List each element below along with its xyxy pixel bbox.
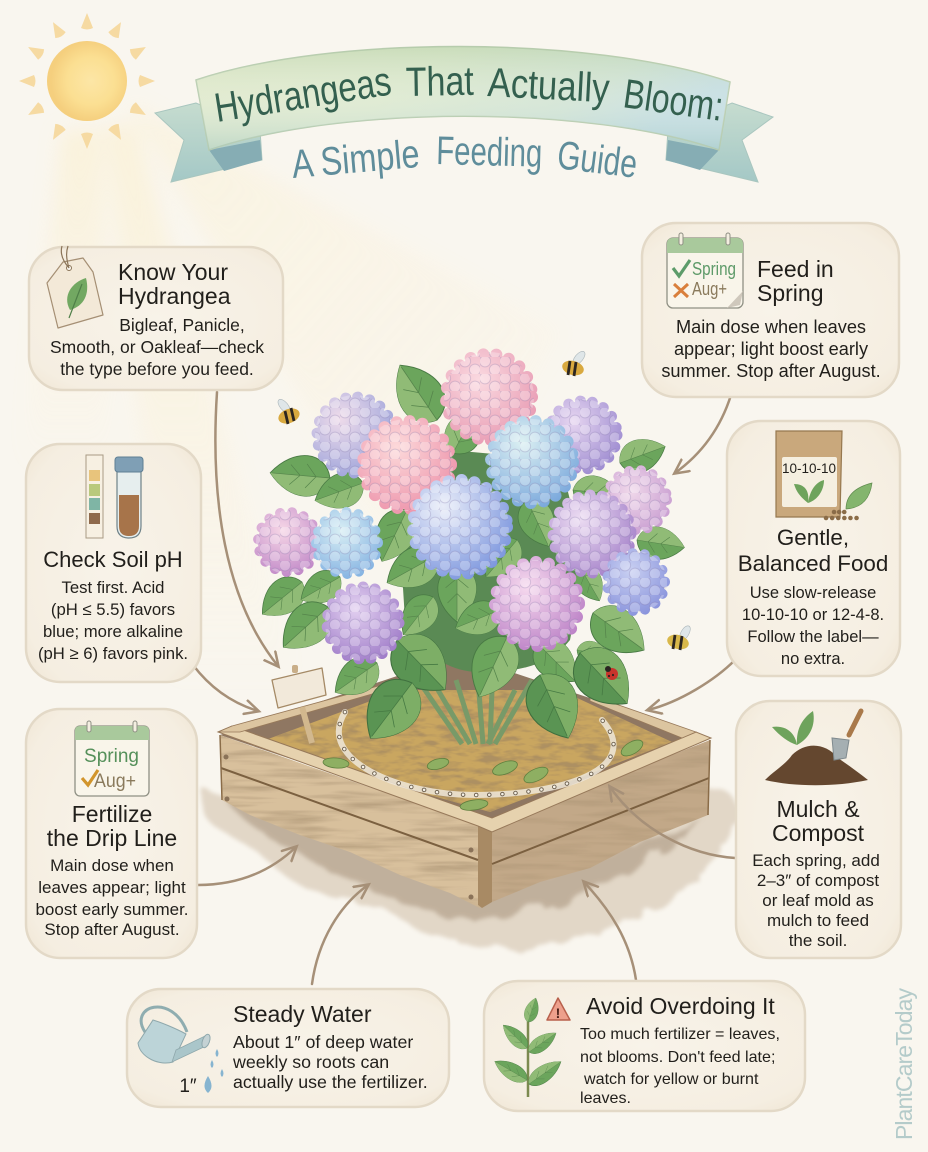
icon: warning triangle: ! [556,1005,560,1021]
bee top right [561,349,587,378]
heading: Avoid Overdoing It [586,993,775,1019]
panel: feed in spring [642,223,899,397]
bee right [666,624,692,652]
stems [418,680,532,744]
body text: weekly so roots can [232,1052,389,1072]
top rim [218,726,711,832]
body text: the soil. [789,931,847,950]
body text: not blooms. Don't feed late; [580,1048,775,1066]
body text: 10-10-10 or 12-4-8. [742,606,884,624]
title line 1: That [405,58,475,105]
soil stain under planter [202,785,738,947]
panel: mulch and compost [736,701,901,958]
panel: know your hydrangea [29,246,283,390]
mulch [252,690,672,812]
dark foliage backing [400,450,585,672]
body text: Follow the label— [747,628,879,646]
panel: steady water [127,989,449,1107]
icon: watering can [138,1007,224,1097]
title line 2 [290,129,640,187]
icon: sun [19,13,155,149]
right wall [492,740,710,902]
icon: fertilizer bag [776,431,872,518]
body text: Too much fertilizer = leaves, [580,1025,780,1043]
body text: summer. Stop after August. [661,361,881,381]
body text: Main dose when [50,856,174,875]
ladybug [605,666,618,680]
body text: Bigleaf, Panicle, [119,315,245,335]
fallen leaves on mulch [323,737,645,812]
arrows [193,392,735,984]
panel: avoid overdoing it [484,981,805,1111]
body text: or leaf mold as [762,891,874,910]
brand watermark: PlantCareToday [891,988,917,1140]
bee left [276,397,302,426]
title line 1: Hydrangeas [211,58,394,131]
sun beams [22,100,560,690]
title line 2: Guide [555,133,640,187]
body text: (pH ≤ 5.5) favors [51,600,175,619]
icon: compost pile with trowel [765,711,868,785]
body text: Main dose when leaves [676,317,866,337]
heading: Spring [757,280,823,306]
title line 1: Bloom: [621,70,726,130]
body text: appear; light boost early [674,339,869,359]
heading: the Drip Line [47,825,177,851]
heading: Mulch & [776,796,860,822]
icon: calendar [75,721,149,796]
body text: mulch to feed [767,911,869,930]
icon: test strip and tube [86,455,143,538]
body text: leaves. [580,1089,631,1107]
body text: Each spring, add [752,851,880,870]
body text: watch for yellow or burnt [583,1070,759,1088]
panel: check soil pH [26,444,201,682]
heading: Balanced Food [738,551,888,576]
icon: calendar with check and cross: Aug+ [692,279,727,299]
title line 1 [211,58,726,131]
inner back wall [220,655,710,826]
body text: Smooth, or Oakleaf—check [50,337,264,357]
body text: About 1″ of deep water [233,1032,413,1052]
body text: (pH ≥ 6) favors pink. [38,644,188,663]
leaves [252,353,687,753]
body text: actually use the fertilizer. [233,1072,428,1092]
heading: Check Soil pH [43,547,183,572]
panel: fertilize the drip line [26,709,197,958]
body text: the type before you feed. [60,359,254,379]
body text: leaves appear; light [38,878,186,897]
body text: blue; more alkaline [43,622,183,641]
icon: watering can: 1″ [179,1076,197,1097]
title line 2: Feeding [436,129,543,176]
planter box [218,655,711,908]
icon: stressed plant [491,996,566,1097]
body text: Stop after August. [44,920,180,939]
icon: warning triangle [547,998,570,1021]
body text: no extra. [781,650,845,668]
heading: Know Your [118,259,228,285]
heading: Compost [772,820,865,846]
title banner [155,46,773,187]
title line 2: A Simple [290,132,421,187]
body text: 2–3″ of compost [757,871,879,890]
flower heads [256,352,669,661]
heading: Hydrangea [118,283,231,309]
front post [478,824,492,908]
garden marker sign [272,665,326,743]
heading: Fertilize [72,801,152,827]
body text: Use slow-release [750,584,876,602]
body text: boost early summer. [35,900,189,919]
icon: calendar: Spring [84,746,139,767]
icon: calendar with check and cross: Spring [692,259,736,279]
hydrangea plant [252,352,687,753]
heading: Gentle, [777,525,849,550]
left wall [220,735,480,908]
body text: Test first. Acid [62,578,164,597]
heading: Feed in [757,256,834,282]
icon: fertilizer bag: 10-10-10 [782,461,836,476]
panel: gentle balanced food [727,421,900,676]
pebble ring [339,712,614,795]
title line 1: Actually [487,59,611,111]
icon: calendar: Aug+ [94,771,136,792]
heading: Steady Water [233,1001,372,1027]
icon: calendar with check and cross [667,233,743,308]
icon: plant tag [47,246,103,328]
